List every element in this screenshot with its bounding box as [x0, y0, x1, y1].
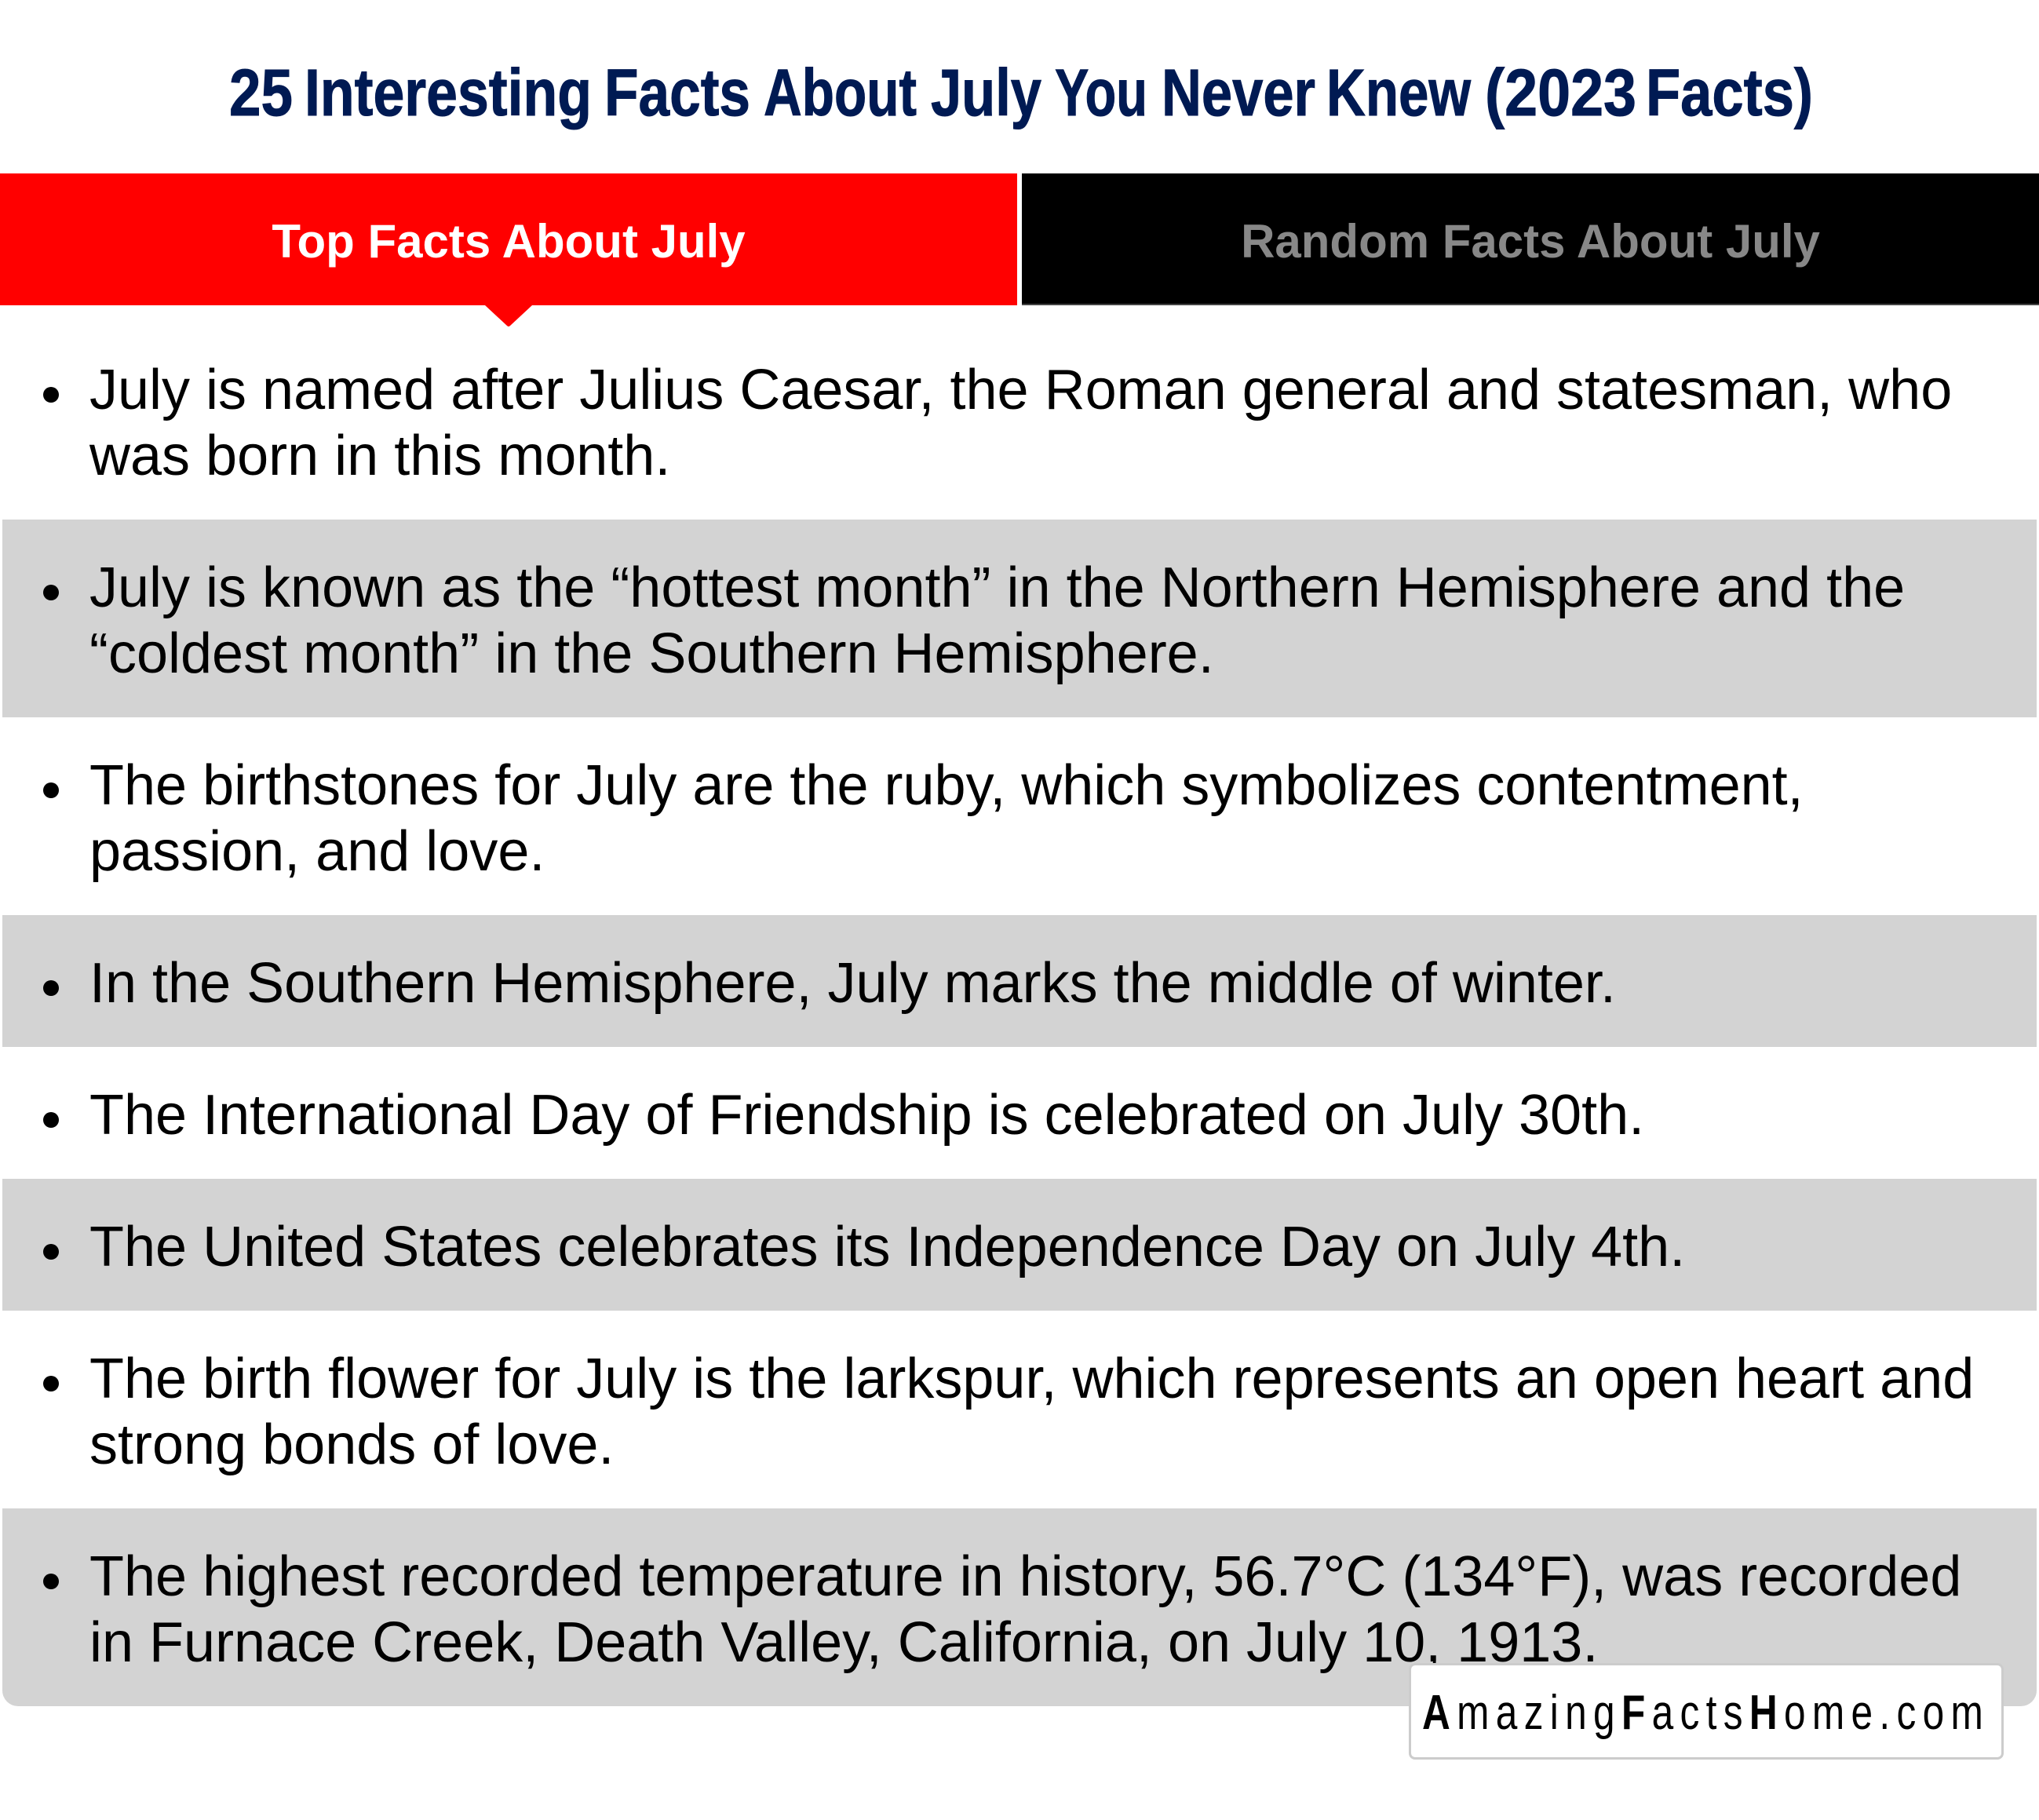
title: Interesting [305, 56, 592, 129]
fact 4: In the Southern Hemisphere, July marks the middle of winter. [89, 952, 1616, 1015]
title [229, 56, 1813, 130]
watermark: AmazingFactsHome.com: AmazingFactsHome.com [1422, 1686, 1990, 1740]
title: Facts [604, 56, 750, 129]
watermark: AmazingFactsHome.com [1409, 1663, 2004, 1760]
fact 8: The highest recorded temperature in history, 56.7°C (134°F), was recorded [89, 1545, 1961, 1608]
title: About [764, 56, 917, 129]
fact 8: in Furnace Creek, Death Valley, California, on July 10, 1913. [89, 1611, 1598, 1674]
fact 2: July is known as the “hottest month” in the Northern Hemisphere and the [89, 556, 1905, 619]
fact 7: The birth flower for July is the larkspur, which represents an open heart and [89, 1348, 1974, 1410]
title: 25 [229, 56, 293, 129]
fact 3 [43, 754, 1804, 883]
fact 1: was born in this month. [89, 425, 670, 487]
tab: random facts (inactive): Random Facts About July [1241, 215, 1820, 268]
title: (2023 [1485, 56, 1636, 129]
fact 5: The International Day of Friendship is celebrated on July 30th. [89, 1084, 1644, 1147]
tab: top facts (active) [0, 173, 1017, 305]
fact 4 [2, 915, 2037, 1047]
title: You [1055, 56, 1147, 129]
fact 7: strong bonds of love. [89, 1413, 614, 1476]
arrow: active tab pointer [485, 305, 532, 326]
fact 2: “coldest month” in the Southern Hemisphere. [89, 622, 1214, 685]
tab: top facts (active): Top Facts About July [272, 215, 746, 268]
fact 3: passion, and love. [89, 820, 545, 883]
fact 8 [2, 1508, 2037, 1706]
fact 2 [2, 520, 2037, 717]
fact 7 [43, 1348, 1974, 1476]
title: Knew [1326, 56, 1472, 129]
tab: random facts (inactive) [1022, 173, 2039, 305]
fact 1 [43, 359, 1952, 487]
title: Never [1162, 56, 1315, 129]
title: July [931, 56, 1041, 129]
fact 6: The United States celebrates its Independence Day on July 4th. [89, 1216, 1685, 1278]
fact 6 [2, 1179, 2037, 1311]
fact 3: The birthstones for July are the ruby, which symbolizes contentment, [89, 754, 1804, 817]
fact 1: July is named after Julius Caesar, the Roman general and statesman, who [89, 359, 1952, 421]
